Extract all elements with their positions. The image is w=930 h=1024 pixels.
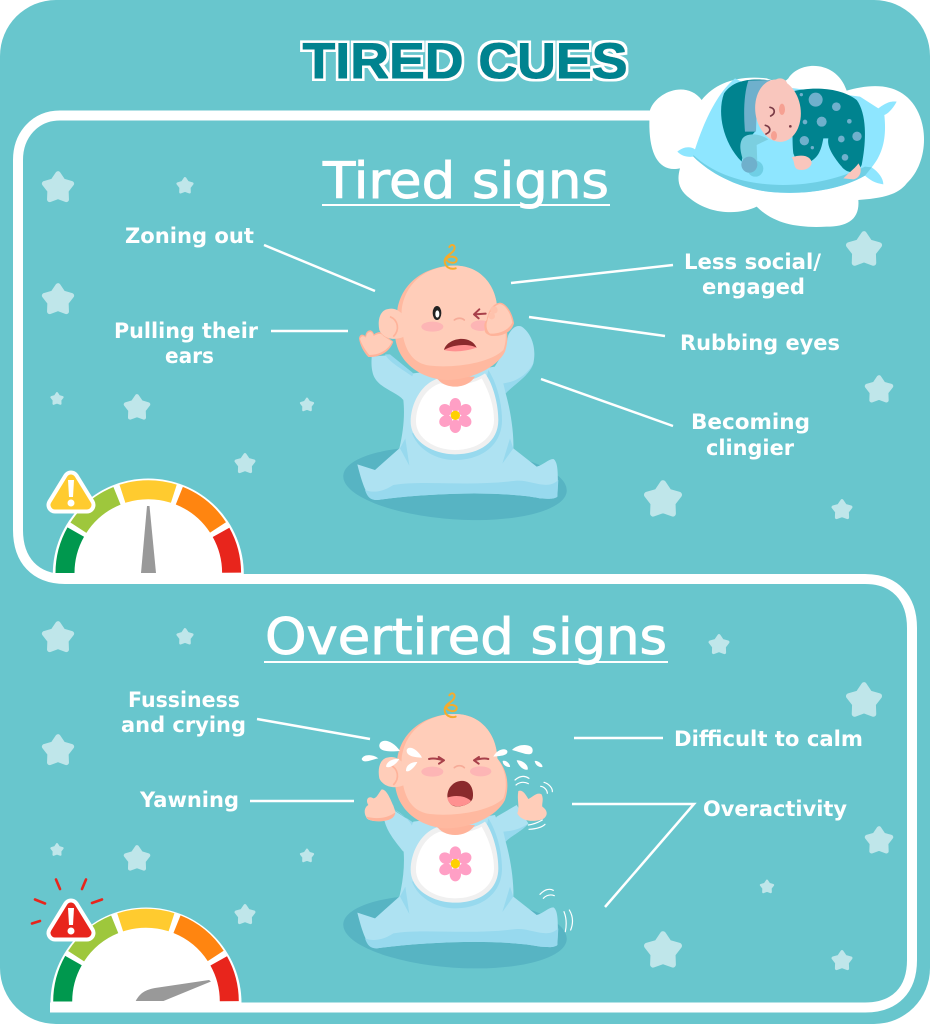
gauge: tired level: [53, 478, 244, 574]
labels: tired signs: Pulling their: [114, 319, 259, 343]
leader lines: overtired signs: [250, 719, 694, 907]
labels: tired signs: Less social/: [684, 250, 821, 274]
labels: tired signs: Rubbing eyes: [680, 331, 840, 355]
icon: red warning triangle with alert rays: [32, 880, 102, 934]
icon: yellow warning triangle: [55, 479, 87, 506]
background stars: overtired panel: [44, 624, 891, 968]
illustration: tired baby rubbing eye: [341, 245, 569, 527]
illustration: overtired baby crying: [341, 693, 573, 975]
labels: overtired signs: Fussiness: [128, 688, 240, 712]
labels: tired signs: engaged: [702, 275, 805, 299]
icon: sleeping baby on pillow: [649, 66, 924, 227]
labels: tired signs: ears: [165, 344, 214, 368]
labels: overtired signs: and crying: [121, 713, 246, 737]
labels: overtired signs: Difficult to calm: [674, 727, 863, 751]
heading: Tired signs: Tired signs: [322, 152, 609, 210]
gauge: overtired level: [50, 908, 242, 1003]
leader lines: tired signs: [264, 245, 673, 426]
background stars: tired panel: [44, 174, 891, 517]
labels: overtired signs: Yawning: [139, 788, 239, 812]
labels: tired signs: clingier: [706, 436, 795, 460]
labels: overtired signs: Overactivity: [703, 797, 847, 821]
title: TIRED CUES: [302, 33, 628, 89]
heading: Overtired signs: Overtired signs: [265, 608, 667, 666]
labels: overtired signs: [121, 688, 863, 821]
labels: tired signs: [114, 224, 840, 460]
labels: tired signs: Becoming: [691, 410, 810, 434]
labels: tired signs: Zoning out: [125, 224, 254, 248]
